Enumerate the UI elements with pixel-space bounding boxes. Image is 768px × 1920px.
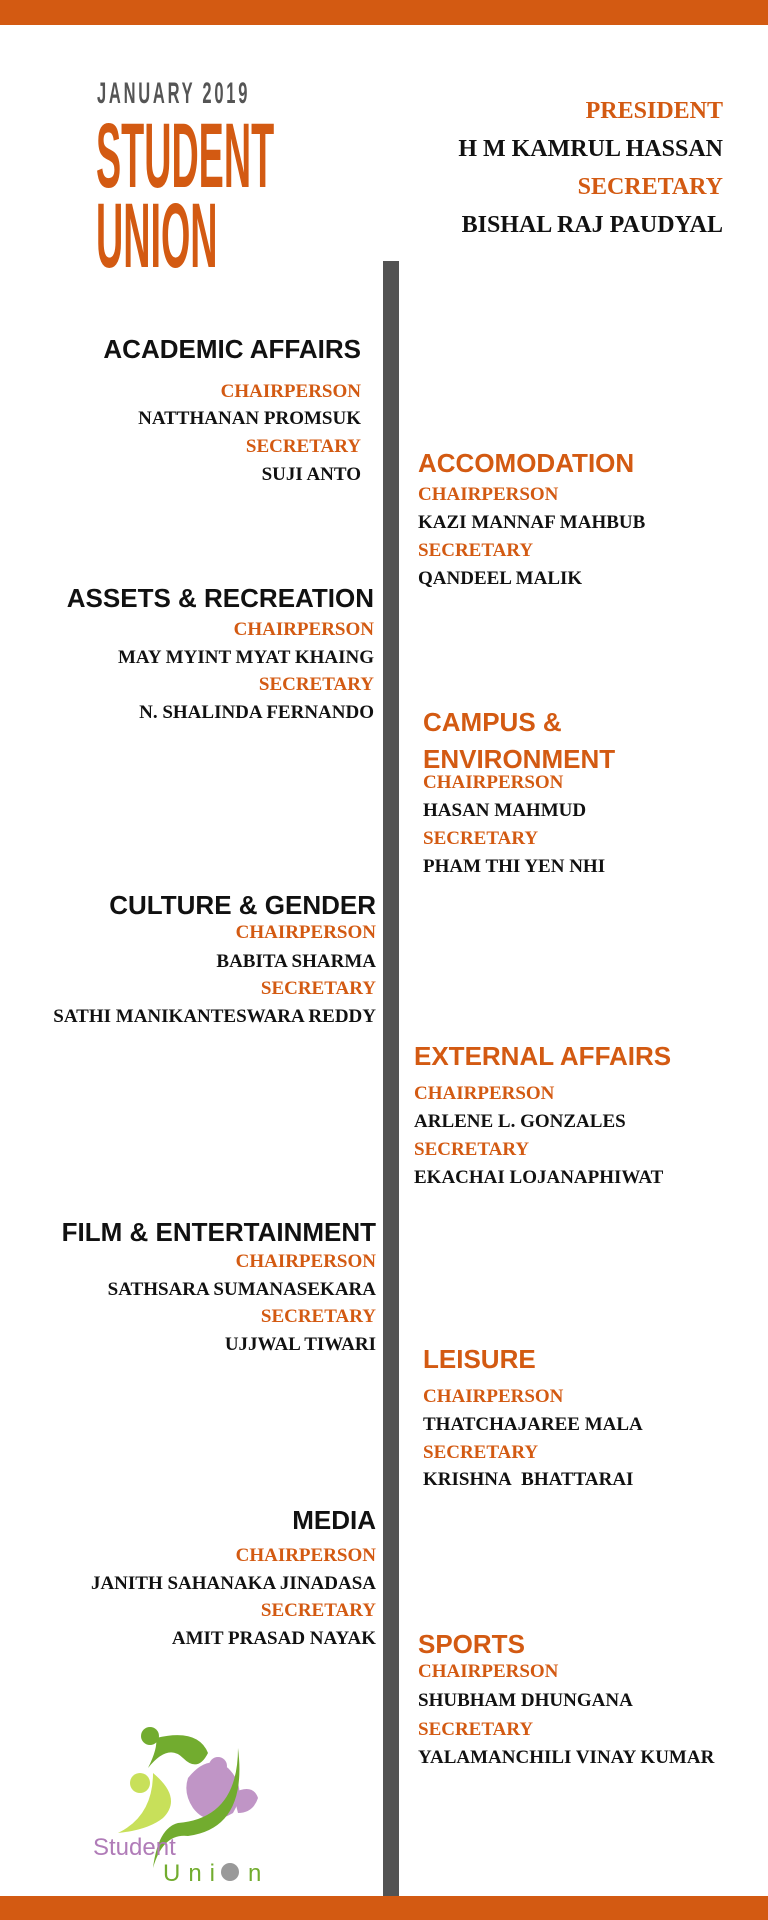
section: sports (418, 1629, 714, 1768)
bottom bar (0, 1896, 768, 1920)
section: external affairs: CHAIRPERSON (414, 1083, 554, 1104)
logo: Uni (163, 1860, 223, 1887)
section: assets & recreation: MAY MYINT MYAT KHAING (118, 647, 374, 668)
section: sports: YALAMANCHILI VINAY KUMAR (418, 1747, 714, 1768)
header: president and secretary: PRESIDENT (586, 98, 723, 124)
section: culture & gender (53, 890, 376, 1027)
section: culture & gender: BABITA SHARMA (216, 951, 376, 972)
section: sports: SECRETARY (418, 1719, 533, 1740)
section: sports: SPORTS (418, 1629, 525, 1659)
section: accomodation: ACCOMODATION (418, 448, 634, 478)
section: accomodation: CHAIRPERSON (418, 484, 558, 505)
section: assets & recreation (67, 583, 374, 723)
section: campus & environment: PHAM THI YEN NHI (423, 856, 605, 877)
section: campus & environment: CAMPUS & (423, 707, 562, 737)
section: media: AMIT PRASAD NAYAK (172, 1628, 376, 1649)
section: culture & gender: CHAIRPERSON (236, 922, 376, 943)
logo: Student (93, 1834, 176, 1861)
section: culture & gender: SECRETARY (261, 978, 376, 999)
section: media (91, 1505, 376, 1649)
section: academic affairs: NATTHANAN PROMSUK (138, 408, 361, 429)
section: campus & environment: HASAN MAHMUD (423, 800, 586, 821)
logo (93, 1727, 261, 1887)
section: accomodation (418, 448, 645, 589)
header: title: UNION (96, 185, 218, 287)
section: sports: SHUBHAM DHUNGANA (418, 1690, 633, 1711)
section: accomodation: SECRETARY (418, 540, 533, 561)
section: media: MEDIA (292, 1505, 376, 1535)
section: campus & environment: ENVIRONMENT (423, 744, 615, 774)
section: leisure: KRISHNA BHATTARAI (423, 1469, 633, 1490)
section: academic affairs: SUJI ANTO (262, 464, 361, 485)
section: assets & recreation: SECRETARY (259, 674, 374, 695)
section: external affairs: EKACHAI LOJANAPHIWAT (414, 1167, 663, 1188)
section: sports: CHAIRPERSON (418, 1661, 558, 1682)
section: leisure: CHAIRPERSON (423, 1386, 563, 1407)
section: media: SECRETARY (261, 1600, 376, 1621)
section: film & entertainment (62, 1217, 376, 1355)
header: president and secretary: H M KAMRUL HASSAN (458, 136, 723, 162)
section: academic affairs: SECRETARY (246, 436, 361, 457)
section: leisure: THATCHAJAREE MALA (423, 1414, 643, 1435)
header: president and secretary (458, 98, 723, 238)
section: academic affairs (103, 334, 361, 485)
top bar (0, 0, 768, 25)
section: assets & recreation: CHAIRPERSON (234, 619, 374, 640)
section: academic affairs: CHAIRPERSON (221, 381, 361, 402)
section: media: CHAIRPERSON (236, 1545, 376, 1566)
section: film & entertainment: UJJWAL TIWARI (225, 1334, 376, 1355)
section: culture & gender: SATHI MANIKANTESWARA REDDY (53, 1006, 376, 1027)
section: external affairs: SECRETARY (414, 1139, 529, 1160)
header: title: STUDENT (96, 105, 274, 207)
logo: n (248, 1860, 261, 1887)
timeline line (383, 261, 399, 1896)
section: campus & environment: CHAIRPERSON (423, 772, 563, 793)
header: title (96, 105, 274, 287)
header: date: JANUARY 2019 (97, 77, 250, 110)
section: academic affairs: ACADEMIC AFFAIRS (103, 334, 361, 364)
section: media: JANITH SAHANAKA JINADASA (91, 1573, 376, 1594)
header: president and secretary: BISHAL RAJ PAUDYAL (462, 212, 723, 238)
section: campus & environment: SECRETARY (423, 828, 538, 849)
section: external affairs: EXTERNAL AFFAIRS (414, 1041, 671, 1071)
section: external affairs (414, 1041, 671, 1188)
section: accomodation: KAZI MANNAF MAHBUB (418, 512, 645, 533)
section: accomodation: QANDEEL MALIK (418, 568, 582, 589)
header: president and secretary: SECRETARY (578, 174, 723, 200)
section: film & entertainment: CHAIRPERSON (236, 1251, 376, 1272)
section: film & entertainment: FILM & ENTERTAINMENT (62, 1217, 376, 1247)
section: campus & environment (423, 707, 615, 877)
section: culture & gender: CULTURE & GENDER (109, 890, 376, 920)
section: film & entertainment: SATHSARA SUMANASEKARA (108, 1279, 376, 1300)
section: leisure (423, 1344, 643, 1490)
section: film & entertainment: SECRETARY (261, 1306, 376, 1327)
section: assets & recreation: N. SHALINDA FERNANDO (139, 702, 374, 723)
section: external affairs: ARLENE L. GONZALES (414, 1111, 626, 1132)
section: assets & recreation: ASSETS & RECREATION (67, 583, 374, 613)
section: leisure: SECRETARY (423, 1442, 538, 1463)
section: leisure: LEISURE (423, 1344, 536, 1374)
